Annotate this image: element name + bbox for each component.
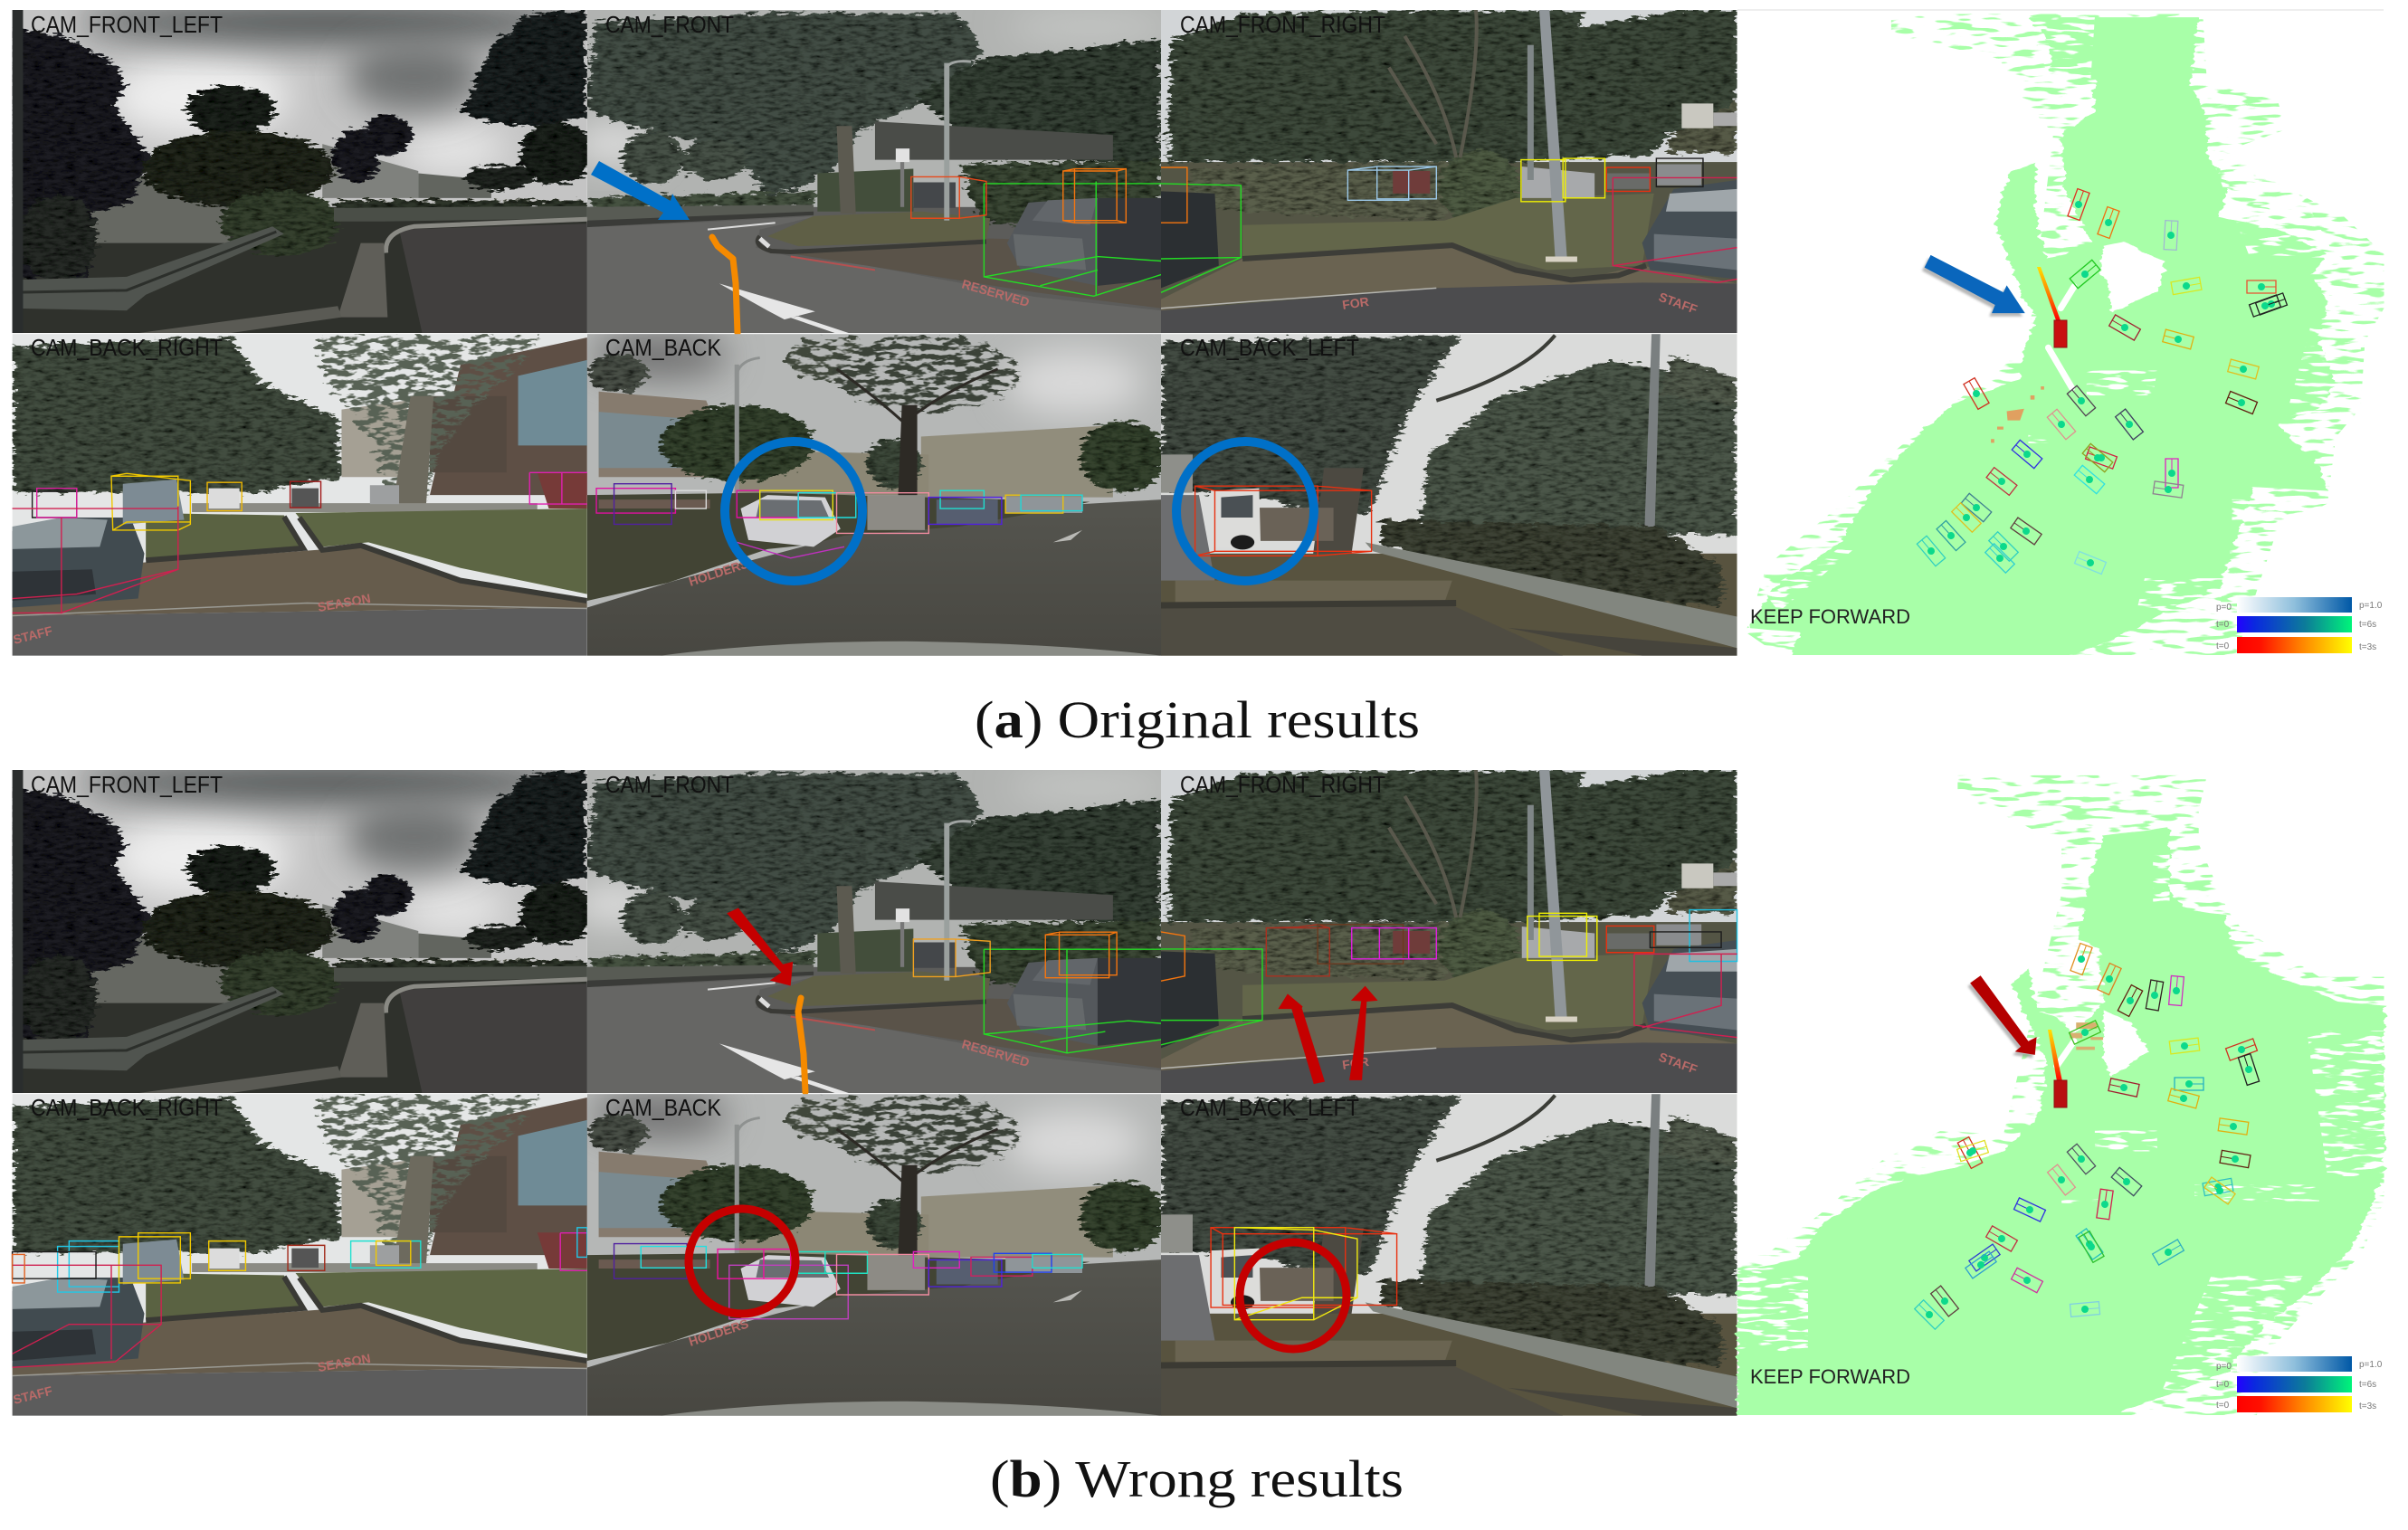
camera view: CAM_FRONT_RIGHT wrong: STAFF bbox=[1657, 1050, 1699, 1077]
map: bird's eye view original bbox=[1737, 10, 2384, 655]
arrows: two red pointing at phantom boxes bbox=[1278, 986, 1378, 1084]
camera view: CAM_BACK original: HOLDERS bbox=[687, 556, 750, 589]
camera view: CAM_BACK_LEFT wrong bbox=[1161, 1094, 1737, 1416]
camera view: CAM_FRONT wrong: RESERVED bbox=[960, 1037, 1031, 1069]
icon: orange planned path bbox=[712, 237, 738, 333]
legend: probability and time colour scales: p=0 bbox=[2216, 603, 2232, 613]
camera view: CAM_FRONT_RIGHT original: STAFF bbox=[1657, 290, 1699, 317]
camera view: CAM_FRONT_LEFT wrong bbox=[13, 762, 594, 1093]
legend: probability and time colour scales: p=0 bbox=[2216, 1362, 2232, 1372]
camera view: CAM_BACK_RIGHT original bbox=[12, 334, 587, 656]
ego vehicle and trajectory bbox=[2037, 267, 2067, 347]
camera view: CAM_BACK wrong bbox=[587, 1093, 1165, 1416]
camera view: CAM_FRONT original bbox=[572, 10, 1175, 333]
map: bird's eye view wrong bbox=[1737, 775, 2384, 1415]
camera view: CAM_BACK_RIGHT wrong: SEASON bbox=[317, 1351, 372, 1374]
camera view: CAM_BACK_RIGHT wrong: STAFF bbox=[12, 1383, 54, 1407]
camera view: CAM_FRONT wrong bbox=[572, 770, 1175, 1093]
callout: blue circle on truck bbox=[1176, 442, 1314, 581]
camera view: CAM_BACK original: CAM_BACK bbox=[605, 334, 722, 361]
legend: probability and time colour scales: t=0 bbox=[2216, 641, 2230, 651]
camera view: CAM_BACK original bbox=[587, 333, 1165, 656]
callout: red circle on wrong box bbox=[1240, 1242, 1347, 1349]
camera view: CAM_BACK_RIGHT original: STAFF bbox=[12, 623, 54, 647]
agent boxes: original bbox=[1917, 189, 2287, 574]
arrow: blue pointing at ego vehicle bbox=[1922, 255, 2025, 317]
camera view: CAM_FRONT_RIGHT original bbox=[1161, 10, 1737, 333]
caption: (b) Wrong results: (b) Wrong results bbox=[990, 1449, 1404, 1508]
legend: probability and time colour scales: t=3s bbox=[2359, 642, 2376, 652]
legend: probability and time colour scales: p=1.0 bbox=[2359, 601, 2383, 611]
camera view: CAM_FRONT_LEFT original: CAM_FRONT_LEFT bbox=[31, 11, 223, 38]
camera view: CAM_BACK_RIGHT wrong bbox=[12, 1094, 587, 1416]
camera view: CAM_BACK_RIGHT original: CAM_BACK_RIGHT bbox=[31, 334, 223, 361]
label: KEEP FORWARD: KEEP FORWARD bbox=[1750, 605, 1910, 628]
camera view: CAM_BACK_LEFT wrong: CAM_BACK_LEFT bbox=[1180, 1094, 1359, 1121]
camera view: CAM_BACK wrong: HOLDERS bbox=[687, 1316, 750, 1349]
camera view: CAM_FRONT_RIGHT wrong: CAM_FRONT_RIGHT bbox=[1180, 771, 1385, 798]
camera view: CAM_BACK_LEFT original: CAM_BACK_LEFT bbox=[1180, 334, 1359, 361]
legend: probability and time colour scales: t=6s bbox=[2359, 620, 2376, 630]
arrow: red pointing at kerb bbox=[727, 908, 793, 986]
label: KEEP FORWARD: KEEP FORWARD bbox=[1750, 1365, 1910, 1388]
camera view: CAM_BACK wrong: CAM_BACK bbox=[605, 1094, 722, 1121]
camera view: CAM_FRONT_RIGHT original: FOR bbox=[1341, 294, 1370, 312]
legend: probability and time colour scales bbox=[2216, 597, 2383, 653]
legend: probability and time colour scales: p=1.0 bbox=[2359, 1360, 2383, 1370]
camera view: CAM_FRONT_RIGHT wrong: FOR bbox=[1341, 1054, 1370, 1072]
legend: probability and time colour scales: t=0 bbox=[2216, 1380, 2230, 1390]
camera view: CAM_BACK_LEFT original bbox=[1161, 334, 1737, 656]
camera view: CAM_FRONT_RIGHT wrong bbox=[1161, 770, 1737, 1093]
camera view: CAM_FRONT original: CAM_FRONT bbox=[605, 11, 734, 38]
legend: probability and time colour scales: t=3s bbox=[2359, 1402, 2376, 1411]
panel: (a) original results bbox=[12, 2, 2384, 656]
panel: (b) wrong results bbox=[12, 762, 2384, 1416]
camera view: CAM_FRONT original: RESERVED bbox=[960, 277, 1031, 309]
arrow: blue pointing at road bbox=[591, 161, 690, 220]
icon: orange planned path bbox=[798, 998, 805, 1092]
legend: probability and time colour scales: t=0 bbox=[2216, 1401, 2230, 1411]
caption: (a) Original results: (a) Original results bbox=[975, 690, 1420, 749]
camera view: CAM_FRONT_LEFT original bbox=[13, 2, 594, 333]
camera view: CAM_BACK_RIGHT original: SEASON bbox=[317, 591, 372, 614]
camera view: CAM_BACK_RIGHT wrong: CAM_BACK_RIGHT bbox=[31, 1094, 223, 1121]
camera view: CAM_FRONT wrong: CAM_FRONT bbox=[605, 771, 734, 798]
ego vehicle and trajectory bbox=[2048, 1030, 2067, 1107]
agent boxes: wrong bbox=[1915, 944, 2260, 1329]
camera view: CAM_FRONT_RIGHT original: CAM_FRONT_RIGHT bbox=[1180, 11, 1385, 38]
callout: red circle on missing box bbox=[689, 1209, 795, 1314]
legend: probability and time colour scales: t=6s bbox=[2359, 1380, 2376, 1390]
callout: blue circle on car bbox=[725, 442, 862, 581]
arrow: red pointing at ego vehicle bbox=[1967, 975, 2037, 1059]
camera view: CAM_FRONT_LEFT wrong: CAM_FRONT_LEFT bbox=[31, 771, 223, 798]
legend: probability and time colour scales: t=0 bbox=[2216, 620, 2230, 630]
legend: probability and time colour scales bbox=[2216, 1356, 2383, 1412]
